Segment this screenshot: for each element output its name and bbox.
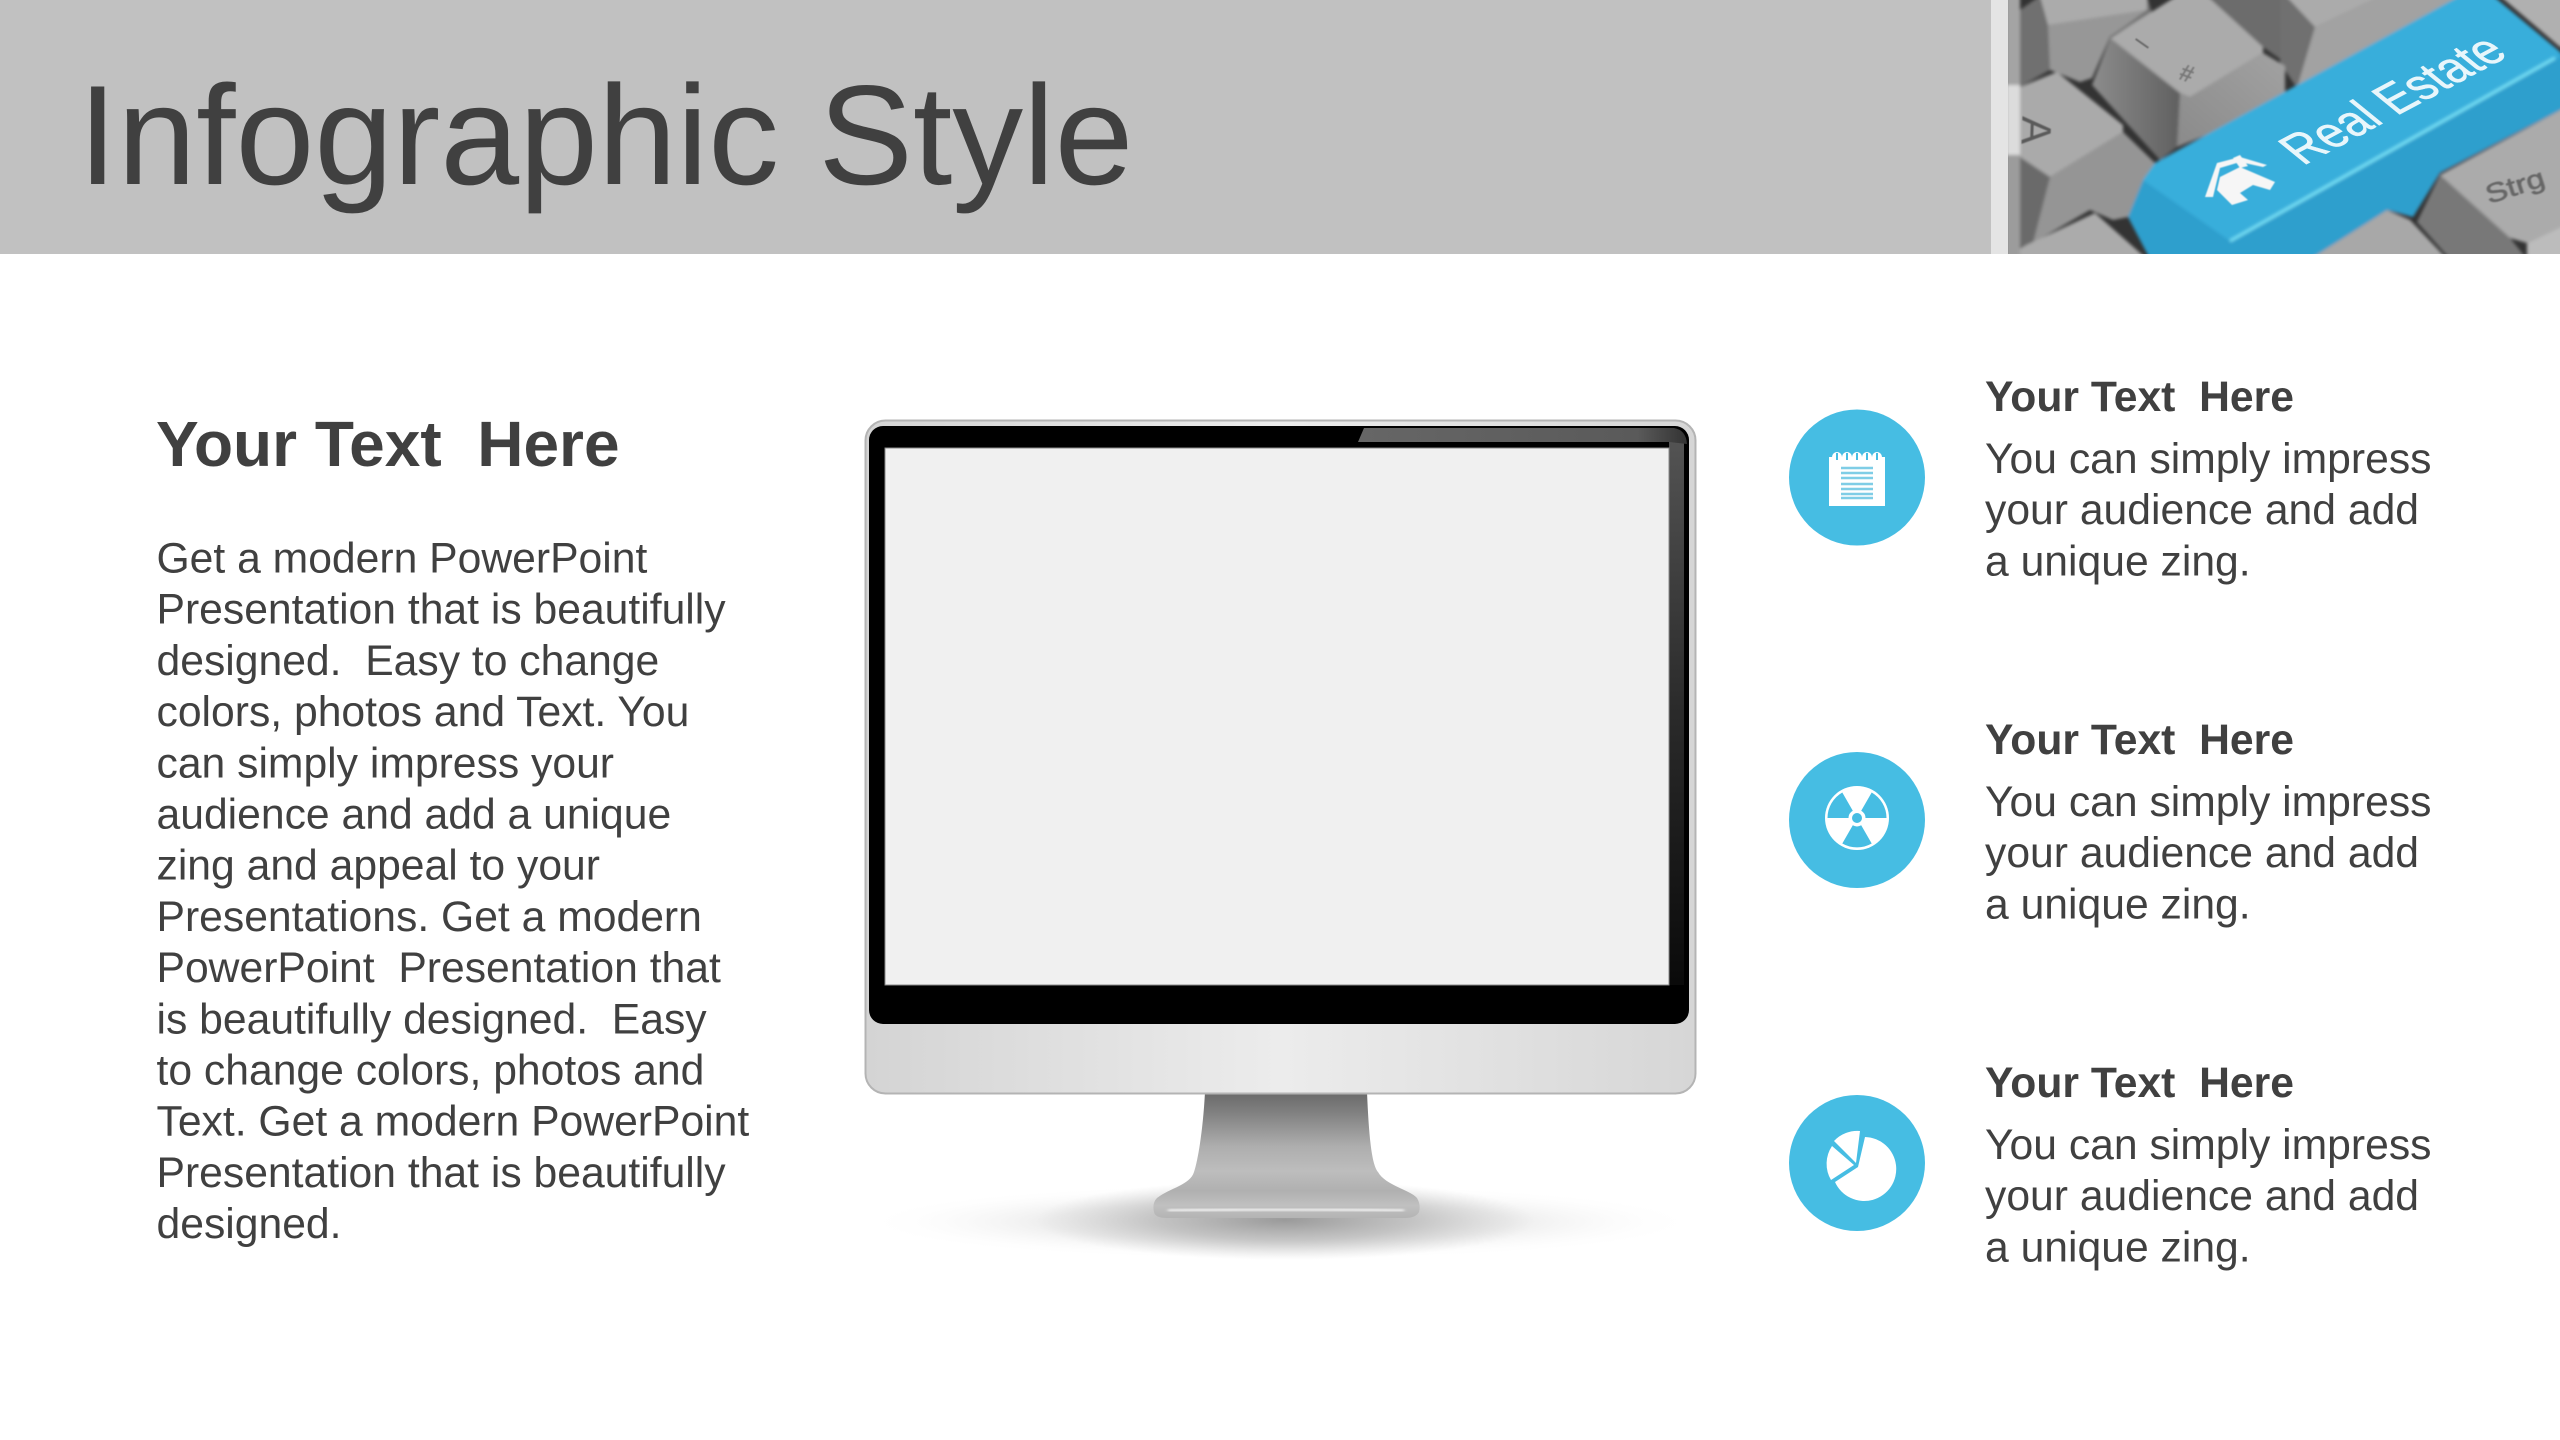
left body paragraph: audience and add a unique: [156, 790, 671, 838]
monitor stand: [1153, 1092, 1420, 1218]
blue key: [2128, 0, 2560, 259]
left body paragraph: colors, photos and Text. You: [156, 688, 689, 736]
item 2 text: You can simply impress: [1985, 778, 2432, 826]
monitor bezel: [869, 426, 1689, 1024]
item 1 text: your audience and add: [1985, 486, 2419, 534]
key legend: Strg: Strg: [2482, 163, 2548, 210]
item 3 text: You can simply impress: [1985, 1121, 2432, 1169]
left body paragraph: Presentation that is beautifully: [156, 1149, 726, 1197]
key top right: [2500, 0, 2560, 47]
key legend: A: A: [2013, 116, 2060, 145]
item 3 text: [1985, 1121, 2432, 1272]
monitor body: [866, 420, 1696, 1094]
left body paragraph: Text. Get a modern PowerPoint: [156, 1098, 749, 1146]
header photo divider: [1991, 0, 2008, 254]
icon: notepad: [1789, 410, 1925, 546]
photo: keyboard with Real Estate key: [2006, 0, 2560, 259]
left body paragraph: designed.: [156, 1200, 342, 1248]
bezel reflection: [1358, 428, 1687, 985]
left body paragraph: Presentations. Get a modern: [156, 893, 702, 941]
key A: [2020, 157, 2050, 247]
left heading: Your Text Here: [156, 408, 620, 480]
icon: radiation symbol: [1789, 752, 1925, 888]
item 1 text: [1985, 435, 2432, 586]
item 1 text: You can simply impress: [1985, 435, 2432, 483]
item 3 text: your audience and add: [1985, 1172, 2419, 1220]
icon: pie chart: [1789, 1095, 1925, 1231]
left body paragraph: Get a modern PowerPoint: [156, 534, 647, 582]
key Strg: [2417, 175, 2527, 259]
item 1: [1789, 373, 2432, 586]
item 1 heading: Your Text Here: [1985, 373, 2294, 421]
item 2 text: [1985, 778, 2432, 928]
item 2 text: your audience and add: [1985, 829, 2419, 877]
item 3 text: a unique zing.: [1985, 1224, 2251, 1272]
key bottom centre: [2310, 210, 2447, 259]
left body paragraph: is beautifully designed. Easy: [156, 995, 707, 1043]
monitor shadow: [860, 1180, 1700, 1260]
item 3: [1789, 1059, 2432, 1272]
item 2 text: a unique zing.: [1985, 880, 2251, 928]
key label: Real Estate: Real Estate: [2266, 26, 2519, 173]
key middle: [2092, 38, 2180, 160]
header band: [0, 0, 2560, 254]
text block: left column: [156, 408, 749, 1248]
key legend: hash: #: [2176, 59, 2197, 89]
title: Infographic Style: [78, 57, 1133, 215]
left body paragraph: can simply impress your: [156, 739, 614, 787]
left body paragraph: zing and appeal to your: [156, 842, 600, 890]
key legend: minus: –: [2128, 24, 2159, 59]
item 1 text: a unique zing.: [1985, 538, 2251, 586]
key top left: [2020, 0, 2152, 87]
key back right: [2209, 0, 2282, 60]
monitor screen: [885, 448, 1669, 985]
monitor illustration: [860, 420, 1700, 1260]
left body paragraph: PowerPoint Presentation that: [156, 944, 721, 992]
left body paragraph: designed. Easy to change: [156, 637, 659, 685]
item 2: [1789, 716, 2432, 928]
item 3 heading: Your Text Here: [1985, 1059, 2294, 1107]
photo edge strip: [2006, 0, 2020, 88]
item 2 heading: Your Text Here: [1985, 716, 2294, 764]
left body paragraph: Presentation that is beautifully: [156, 586, 726, 634]
icon: house on key: [2205, 155, 2275, 205]
left body paragraph: [156, 534, 749, 1248]
key bottom left: [2020, 213, 2147, 259]
key top middle: [2278, 0, 2316, 88]
left body paragraph: to change colors, photos and: [156, 1046, 704, 1094]
